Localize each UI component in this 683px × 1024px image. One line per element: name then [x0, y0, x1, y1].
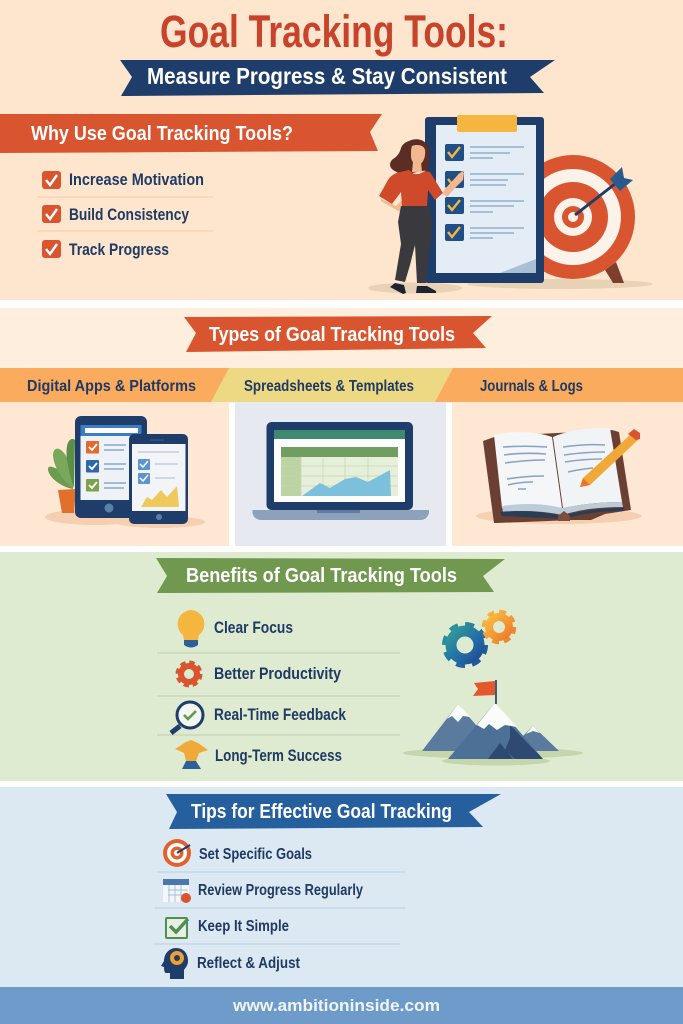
icon: plant [48, 439, 76, 513]
footer bar: www.ambitioninside.com [232, 996, 440, 1015]
icon: phone [129, 434, 188, 524]
panel: types of goal tracking tools [0, 308, 683, 546]
illustration: target [511, 155, 635, 283]
benefit: better productivity: Better Productivity [214, 664, 341, 683]
illustration: shadow [368, 279, 653, 294]
heading ribbon: why use: Why Use Goal Tracking Tools? [31, 123, 293, 145]
icon: pencil [580, 429, 640, 487]
card: digital apps [0, 402, 229, 546]
icon: mountain and flag [403, 680, 583, 766]
tip: set specific goals: Set Specific Goals [199, 846, 312, 863]
heading ribbon: types: Types of Goal Tracking Tools [209, 324, 455, 346]
tab band: Journals & Logs [480, 378, 583, 395]
benefit: clear focus [178, 610, 293, 648]
heading ribbon: tips [166, 794, 501, 829]
tip: keep it simple [166, 918, 289, 938]
illustration: clipboard [425, 115, 544, 283]
heading ribbon: benefits: Benefits of Goal Tracking Tools [186, 565, 457, 587]
icon: gears [446, 612, 514, 664]
panel: benefits of goal tracking tools [0, 552, 683, 781]
checklist: build consistency [42, 205, 189, 224]
tip: review progress regularly [163, 879, 363, 903]
heading ribbon: why use [0, 114, 382, 153]
tip: set specific goals [163, 839, 312, 867]
benefit: better productivity [178, 663, 341, 685]
tab band: Digital Apps & Platforms [27, 378, 196, 395]
panel: tips for effective goal tracking [0, 787, 683, 987]
card: spreadsheets [235, 402, 446, 546]
tip: reflect and adjust [161, 948, 301, 979]
heading ribbon: types [184, 316, 492, 352]
footer bar [0, 987, 683, 1024]
subtitle ribbon [120, 60, 555, 96]
tip: reflect and adjust: Reflect & Adjust [197, 955, 301, 972]
checklist: increase motivation: Increase Motivation [69, 170, 204, 189]
icon: book [483, 428, 631, 523]
title: Goal Tracking Tools: [160, 6, 508, 57]
illustration: woman [379, 139, 464, 294]
benefit: real-time feedback: Real-Time Feedback [214, 705, 346, 724]
heading ribbon: tips: Tips for Effective Goal Tracking [191, 801, 452, 823]
benefit: clear focus: Clear Focus [214, 618, 293, 637]
panel: why use goal tracking tools [0, 0, 683, 300]
tip: keep it simple: Keep It Simple [198, 918, 289, 935]
checklist: track progress [42, 240, 169, 259]
benefit: long-term success [175, 740, 342, 769]
heading ribbon: benefits [156, 558, 505, 593]
subtitle ribbon: Measure Progress & Stay Consistent [147, 63, 507, 89]
icon: laptop [252, 422, 429, 520]
tab band: Spreadsheets & Templates [244, 378, 414, 395]
benefit: real-time feedback [171, 702, 346, 733]
icon: tablet [75, 416, 147, 518]
checklist: track progress: Track Progress [69, 240, 169, 259]
tip: review progress regularly: Review Progress Regularly [198, 882, 363, 899]
tab band [0, 368, 683, 402]
checklist: build consistency: Build Consistency [69, 205, 189, 224]
benefit: long-term success: Long-Term Success [215, 746, 342, 765]
card: journals [452, 402, 683, 546]
